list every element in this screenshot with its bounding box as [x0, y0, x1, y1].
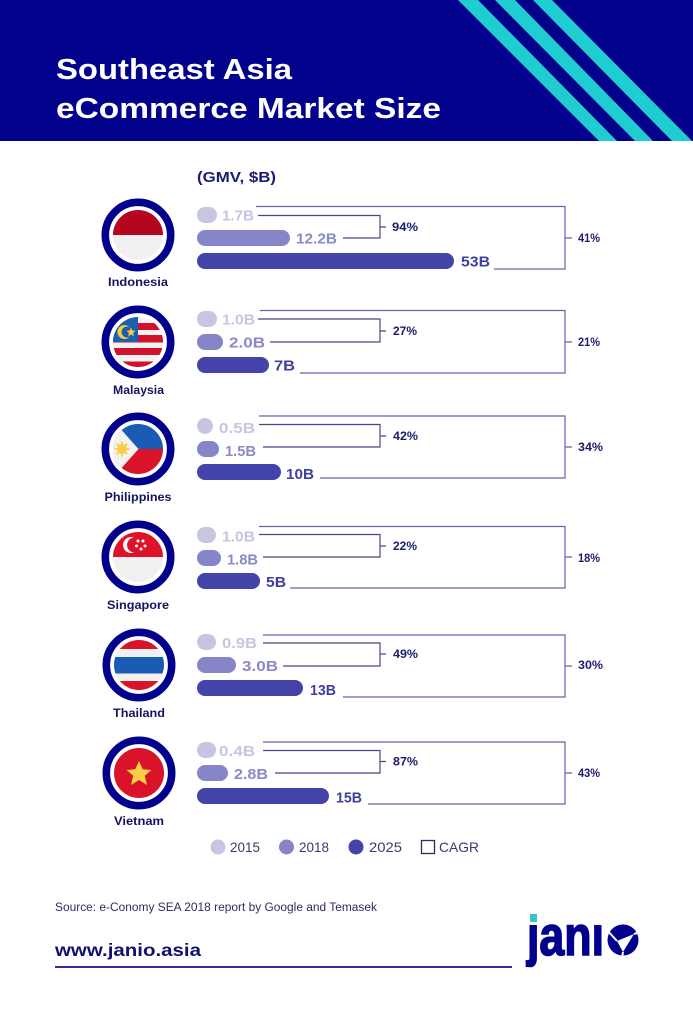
legend: 2018 — [299, 839, 329, 855]
CAGR brackets: 49% — [393, 649, 418, 661]
CAGR brackets: 30% — [578, 660, 603, 672]
values: 0.9B — [222, 635, 257, 652]
CAGR brackets: 41% — [578, 233, 600, 245]
values: 53B — [461, 254, 490, 270]
values: 12.2B — [296, 230, 337, 248]
country label: Vietnam — [114, 816, 164, 828]
CAGR brackets: 21% — [578, 337, 600, 349]
website link: www.janio.asia — [54, 940, 201, 960]
header banner — [0, 0, 693, 141]
values — [222, 312, 295, 374]
values: 2.8B — [234, 766, 268, 783]
icon: Malaysia flag — [105, 309, 171, 375]
values — [222, 208, 490, 270]
legend: 2025 — [369, 839, 402, 855]
legend — [210, 839, 479, 855]
values: 7B — [274, 358, 295, 374]
values: 3.0B — [242, 658, 278, 675]
values: 13B — [310, 682, 336, 699]
footer rule — [55, 966, 512, 968]
values: 1.8B — [227, 552, 258, 568]
source note: Source: e-Conomy SEA 2018 report by Google and Temasek — [55, 902, 377, 914]
panel: Indonesia — [105, 202, 600, 289]
bars — [197, 311, 269, 373]
CAGR brackets: 22% — [393, 541, 417, 553]
CAGR brackets: 18% — [578, 553, 600, 565]
values: 1.0B — [222, 528, 255, 546]
values — [219, 420, 314, 483]
values: 1.7B — [222, 208, 254, 224]
legend: CAGR — [439, 839, 479, 855]
panel: Thailand — [106, 632, 603, 720]
legend: 2015 — [230, 839, 260, 855]
CAGR brackets: 27% — [393, 326, 417, 338]
logo: janio: jani — [526, 904, 604, 967]
title: Southeast Asia — [56, 54, 293, 86]
values — [222, 635, 336, 699]
CAGR brackets: 94% — [392, 222, 418, 234]
values: 1.0B — [222, 312, 255, 328]
bars — [197, 207, 454, 269]
CAGR brackets — [263, 635, 603, 697]
values: 15B — [336, 790, 362, 806]
title — [56, 54, 441, 125]
values — [222, 528, 286, 591]
CAGR brackets — [258, 310, 600, 373]
panel: Singapore — [105, 524, 600, 612]
CAGR brackets — [259, 526, 600, 588]
values: 5B — [266, 574, 286, 591]
country label: Thailand — [113, 708, 165, 720]
unit label: (GMV, $B) — [197, 170, 276, 186]
icon: Thailand flag — [106, 632, 172, 698]
CAGR brackets: 34% — [578, 442, 603, 454]
CAGR brackets: 42% — [393, 431, 418, 443]
bars — [197, 418, 281, 480]
bars — [197, 634, 303, 696]
icon: Vietnam flag — [106, 740, 172, 806]
bars — [197, 742, 329, 804]
values — [219, 743, 362, 806]
country label: Philippines — [104, 492, 172, 504]
icon: Philippines flag — [105, 416, 171, 482]
values: 0.5B — [219, 420, 255, 437]
CAGR brackets — [259, 416, 603, 478]
bars — [197, 527, 260, 589]
icon: Indonesia flag — [105, 202, 171, 268]
CAGR brackets: 87% — [393, 756, 418, 768]
CAGR brackets: 43% — [578, 768, 600, 780]
country label: Indonesia — [108, 277, 169, 289]
CAGR brackets — [256, 206, 600, 269]
values: 2.0B — [229, 334, 265, 352]
values: 0.4B — [219, 743, 255, 760]
icon: Singapore flag — [105, 524, 171, 590]
panel: Malaysia — [105, 309, 600, 397]
panel: Vietnam — [106, 740, 600, 828]
CAGR brackets — [263, 742, 600, 804]
diagonal stripes — [458, 0, 692, 141]
country label: Singapore — [107, 600, 169, 612]
values: 10B — [286, 466, 314, 483]
title: eCommerce Market Size — [56, 93, 441, 125]
country label: Malaysia — [113, 385, 165, 397]
values: 1.5B — [225, 443, 256, 460]
panel: Philippines — [104, 416, 603, 504]
